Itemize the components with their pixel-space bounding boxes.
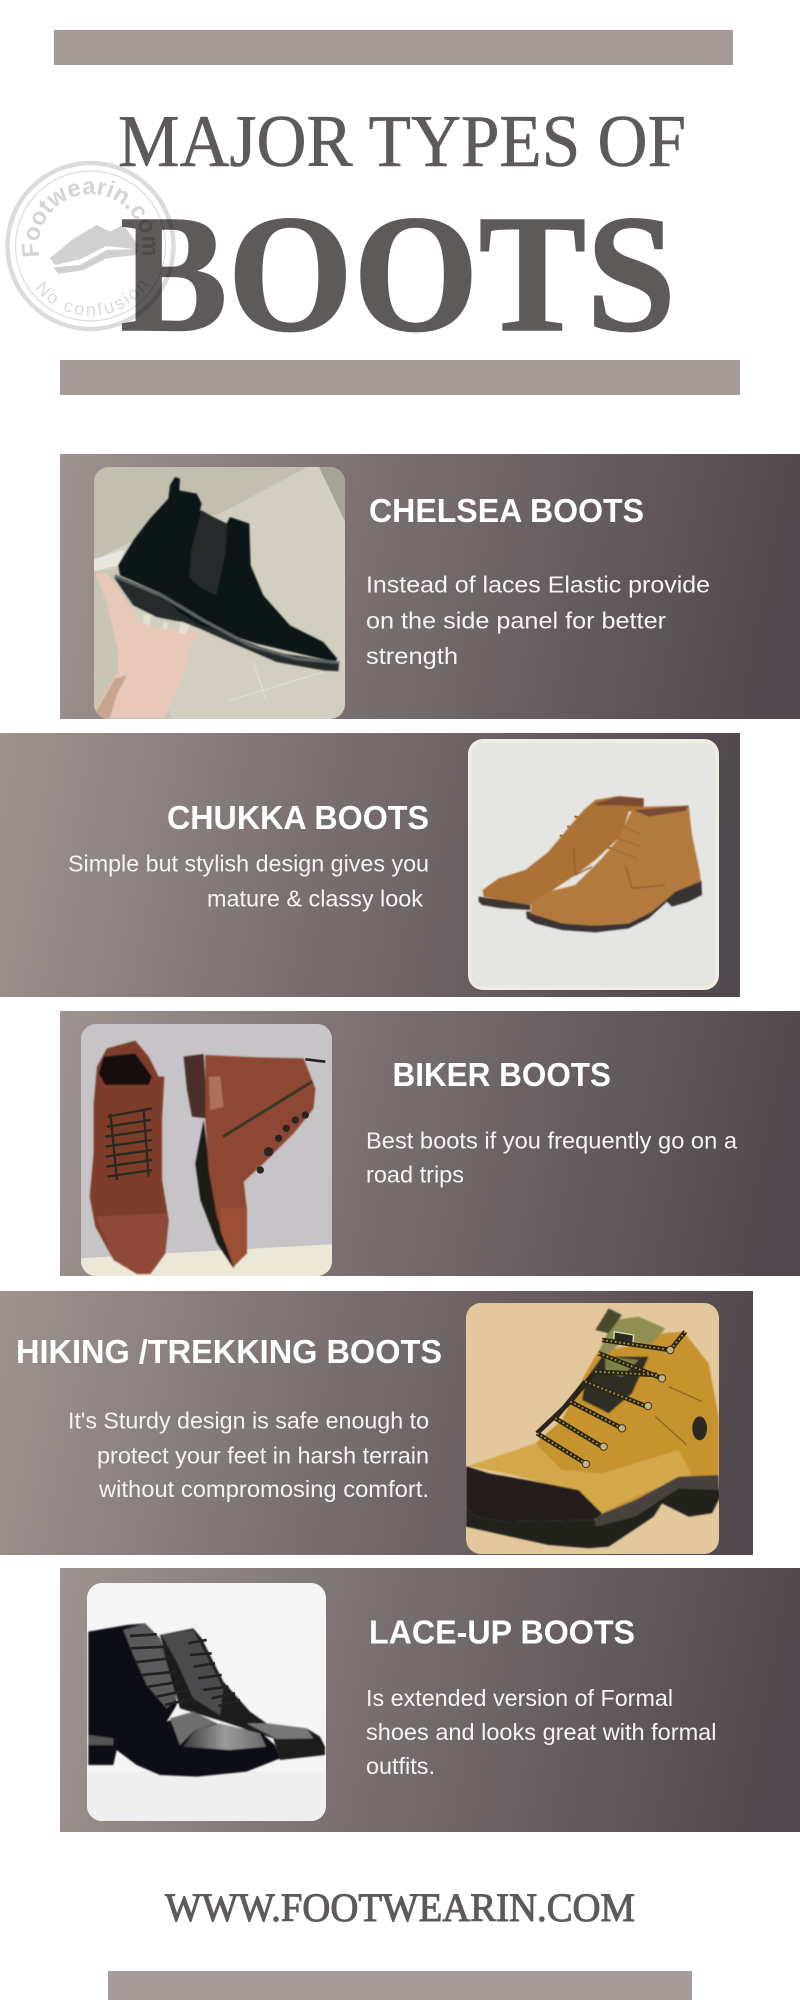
- description: shoes and looks great with formal: [366, 1719, 716, 1745]
- description: mature & classy look: [207, 886, 423, 912]
- front boot sole: [526, 880, 702, 932]
- panel background: [60, 1568, 800, 1832]
- eyelets: [582, 1346, 674, 1468]
- heading: BIKER BOOTS: [392, 1056, 611, 1093]
- description: [68, 1408, 429, 1502]
- boot upper: [516, 1330, 719, 1514]
- description: outfits.: [366, 1753, 435, 1779]
- sole: [466, 1485, 719, 1550]
- heading: LACE-UP BOOTS: [369, 1614, 635, 1650]
- panel: chelsea boots: [60, 454, 800, 722]
- stamp shoe icon: [50, 225, 138, 274]
- finger gaps: [143, 614, 189, 635]
- back boot: [483, 796, 644, 905]
- right boot lace knots: [257, 1111, 309, 1174]
- description: Instead of laces Elastic provide: [366, 572, 710, 598]
- stamp top text: Footwearin.com: [22, 180, 156, 256]
- description: road trips: [366, 1162, 464, 1188]
- panel: hiking and trekking boots: [0, 1291, 753, 1560]
- collar: [599, 1317, 665, 1357]
- description: protect your feet in harsh terrain: [97, 1442, 429, 1468]
- bar below title: [60, 360, 740, 395]
- top decorative bar: [54, 30, 733, 65]
- panel background: [0, 733, 740, 997]
- description: Best boots if you frequently go on a: [366, 1128, 737, 1154]
- right boot upper: [205, 1055, 315, 1267]
- description: [366, 572, 710, 669]
- left boot laces: [105, 1108, 152, 1180]
- midsole: [595, 1475, 719, 1527]
- title line: major types of: MAJOR TYPES OF: [118, 101, 686, 183]
- side logo: [692, 1416, 707, 1440]
- title line: boots: BOOTS: [120, 181, 676, 367]
- description: strength: [366, 643, 458, 669]
- laces: [561, 817, 640, 858]
- panel: chukka boots: [0, 733, 740, 997]
- heading: CHELSEA BOOTS: [369, 492, 644, 529]
- photo: chelsea boot held in hand: [90, 462, 350, 722]
- left boot: [90, 1041, 169, 1274]
- description: Simple but stylish design gives you: [68, 850, 429, 876]
- boot sole: [114, 577, 339, 671]
- hand: [95, 574, 200, 718]
- description: [366, 1685, 716, 1779]
- photo: yellow hiking boot: [462, 1300, 722, 1560]
- title: [118, 101, 686, 367]
- laces: [537, 1332, 685, 1463]
- front boot: [88, 1623, 280, 1777]
- right boot sole: [195, 1120, 236, 1268]
- back boot sole: [479, 897, 530, 910]
- panel background: [60, 454, 800, 719]
- stamp rings: [8, 163, 174, 329]
- welt: [115, 576, 339, 663]
- panel background: [0, 1291, 753, 1555]
- photo: brown biker boots: [77, 1020, 337, 1280]
- stamp bottom text: No confusion: [36, 281, 148, 316]
- zipper: [223, 1082, 312, 1137]
- description: [366, 1128, 737, 1188]
- boot upper: [118, 477, 337, 662]
- description: Is extended version of Formal: [366, 1685, 673, 1711]
- tongue: [582, 1357, 649, 1413]
- website footer: WWW.FOOTWEARIN.COM: [165, 1885, 635, 1930]
- photo: black lace-up boots: [87, 1583, 326, 1821]
- laces: [130, 1634, 240, 1706]
- back boot: [160, 1628, 325, 1760]
- panel: biker boots: [60, 1011, 800, 1280]
- description: It's Sturdy design is safe enough to: [68, 1408, 429, 1434]
- panel: lace-up boots: [60, 1568, 800, 1835]
- heading: HIKING /TREKKING BOOTS: [16, 1333, 442, 1370]
- stitched vents: [655, 1387, 702, 1445]
- description: on the side panel for better: [366, 608, 666, 634]
- description: without compromosing comfort.: [98, 1476, 429, 1502]
- panel background: [60, 1011, 800, 1276]
- heading: CHUKKA BOOTS: [167, 799, 429, 836]
- front boot: [530, 806, 700, 926]
- right boot heel: [184, 1054, 208, 1118]
- toe cap: [466, 1466, 602, 1522]
- photo: tan chukka boots: [468, 739, 719, 990]
- elastic panel: [189, 510, 227, 595]
- watermark stamp: [5, 160, 176, 332]
- bottom decorative bar: [108, 1971, 692, 2000]
- description: [68, 850, 429, 912]
- label: [614, 1332, 634, 1345]
